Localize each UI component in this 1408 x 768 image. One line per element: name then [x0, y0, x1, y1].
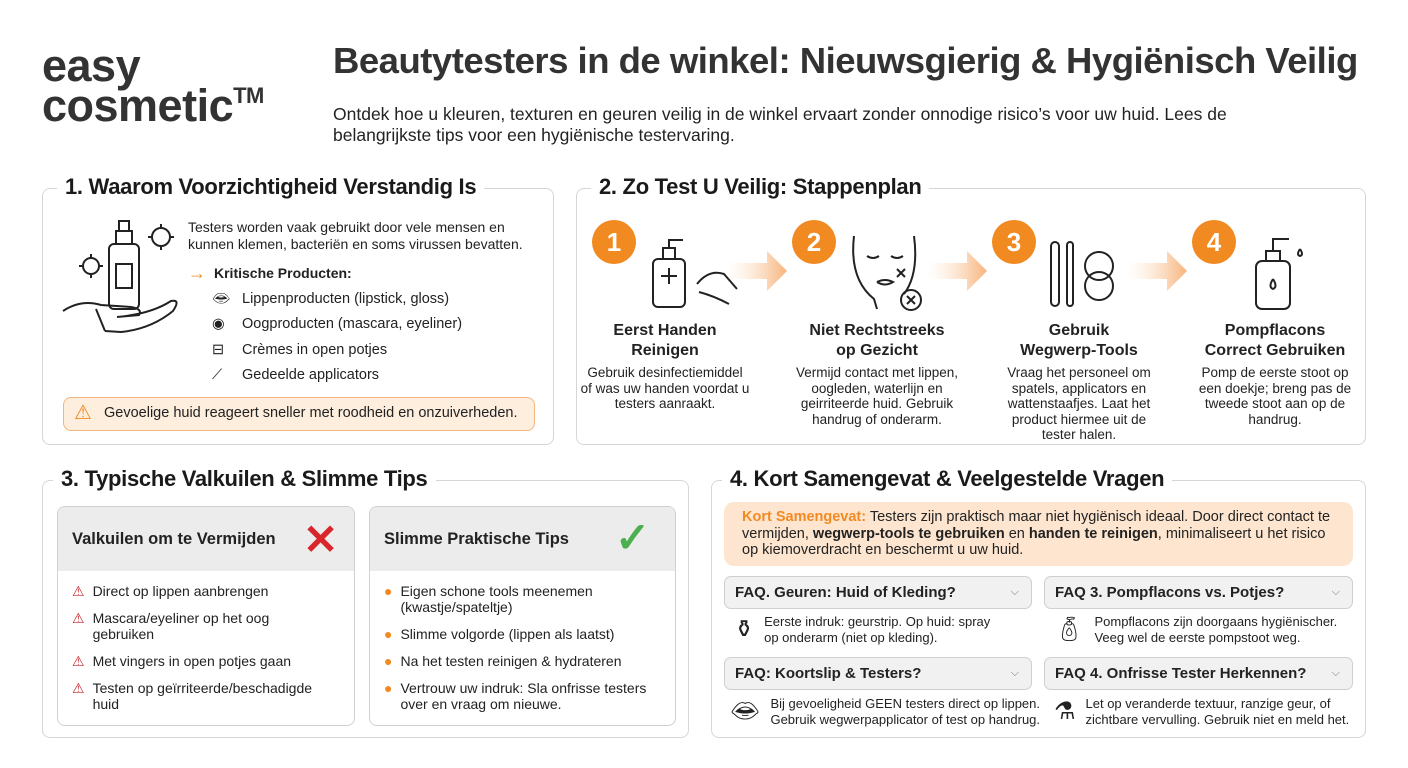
faq 1 answer: op onderarm (niet op kleding).	[764, 630, 938, 645]
faq 1: FAQ. Geuren: Huid of Kleding?	[735, 584, 956, 601]
list: kritische producten: ⟋	[212, 367, 222, 383]
faq 2 answer: Bij gevoeligheid GEEN testers direct op lippen.	[770, 696, 1040, 711]
step 1: Reinigen	[631, 342, 699, 359]
faq 1 answer	[734, 614, 990, 645]
heading 3: 3. Typische Valkuilen & Slimme Tips	[61, 466, 428, 491]
faq 1 answer: ⚱	[734, 616, 754, 643]
card: tips: ●	[384, 583, 392, 599]
step 3: 3	[1007, 227, 1021, 257]
heading 2: 2. Zo Test U Veilig: Stappenplan	[599, 174, 921, 199]
card: valkuilen: Met vingers in open potjes gaan	[93, 653, 291, 669]
card: tips: ●	[384, 653, 392, 669]
step 2: op Gezicht	[836, 342, 918, 359]
step 2: Niet Rechtstreeks	[809, 322, 945, 339]
card: valkuilen: ⚠	[72, 610, 85, 626]
card: valkuilen	[57, 506, 355, 726]
faq 2 answer: 👄︎	[730, 698, 760, 725]
faq 4: ⌵	[1332, 667, 1340, 679]
callout: gevoelige huid: Gevoelige huid reageert sneller met roodheid en onzuiverheden.	[104, 405, 518, 421]
card: valkuilen: Mascara/eyeliner op het oog	[93, 610, 269, 626]
card: valkuilen: huid	[93, 696, 119, 712]
faq 2: ⌵	[1011, 667, 1019, 679]
step 4: Pomp de eerste stoot op een doekje; breng pas de tweede stoot aan op de handrug.	[1199, 365, 1351, 426]
faq 4	[1044, 657, 1353, 690]
faq 4 answer: Let op veranderde textuur, ranzige geur, of	[1086, 696, 1331, 711]
arrow 1	[735, 251, 787, 291]
list: kritische producten: 👄︎	[212, 290, 230, 306]
step 4: 4	[1207, 227, 1221, 257]
card: tips: (kwastje/spateltje)	[400, 599, 513, 615]
faq 4 answer: ⚗	[1054, 698, 1076, 725]
step 3: Gebruik	[1049, 322, 1109, 339]
panel: waarom voorzichtigheid	[42, 188, 554, 445]
faq 3 answer	[1054, 614, 1337, 645]
text: intro: Testers worden vaak gebruikt door vele mensen en kunnen klemen, bacteriën en soms virussen bevatten.	[188, 219, 523, 252]
step 2: 2	[807, 227, 821, 257]
card: tips: ●	[384, 680, 392, 696]
list: kritische producten: Oogproducten (mascara, eyeliner)	[242, 316, 462, 332]
faq 4 answer: zichtbare vervulling. Gebruik niet en meld het.	[1086, 712, 1349, 727]
icon: hand with spray bottle and germs	[62, 220, 178, 333]
step 2	[792, 220, 958, 427]
faq 4 answer	[1054, 696, 1349, 727]
list: kritische producten	[188, 263, 462, 383]
list: kritische producten: Lippenproducten (lipstick, gloss)	[242, 290, 449, 306]
card: valkuilen: Direct op lippen aanbrengen	[93, 583, 268, 599]
faq 3: FAQ 3. Pompflacons vs. Potjes?	[1055, 584, 1284, 601]
faq 3 answer: Veeg wel de eerste pompstoot weg.	[1094, 630, 1300, 645]
faq 2 answer	[730, 696, 1040, 727]
faq 4: FAQ 4. Onfrisse Tester Herkennen?	[1055, 665, 1306, 682]
arrow 3	[1135, 251, 1187, 291]
card: tips: ●	[384, 626, 392, 642]
faq 1 answer: Eerste indruk: geurstrip. Op huid: spray	[764, 614, 990, 629]
step 4	[1192, 220, 1351, 427]
step 3: Wegwerp-Tools	[1020, 342, 1138, 359]
list: kritische producten: →	[188, 263, 206, 283]
faq 3 answer: 🧴︎	[1054, 616, 1084, 643]
step 4: Pompflacons	[1225, 322, 1325, 339]
card: tips: Eigen schone tools meenemen	[400, 583, 593, 599]
card: tips	[369, 506, 676, 726]
faq 1	[724, 576, 1032, 609]
subtitle: Ontdek hoe u kleuren, texturen en geuren veilig in de winkel ervaart zonder onnodige risico’s voor uw huid. Lees de belangrijkste tips voor een hygiënische testervaring.	[333, 104, 1227, 145]
logo: easy	[42, 40, 140, 91]
faq 2 answer: Gebruik wegwerpapplicator of test op handrug.	[770, 712, 1040, 727]
faq 3 answer: Pompflacons zijn doorgaans hygiënischer.	[1094, 614, 1337, 629]
panel: valkuilen & tips	[42, 480, 689, 738]
callout: gevoelige huid: ⚠	[74, 402, 92, 424]
step 1: 1	[607, 227, 621, 257]
step 2: Vermijd contact met lippen, oogleden, waterlijn en geirriteerde huid. Gebruik handrug of onderarm.	[796, 365, 958, 426]
step 1	[581, 220, 749, 411]
step 3: Vraag het personeel om spatels, applicators en wattenstaafjes. Laat het product hiermee uit de tester halen.	[1007, 365, 1151, 442]
card: valkuilen: Valkuilen om te Vermijden	[72, 530, 276, 548]
card: valkuilen: ✕	[303, 516, 338, 563]
title: Beautytesters in de winkel: Nieuwsgierig & Hygiënisch Veilig	[333, 40, 1358, 81]
card: valkuilen: Testen op geïrriteerde/beschadigde	[93, 680, 312, 696]
list: kritische producten: Kritische Producten:	[214, 265, 352, 281]
step 1: Eerst Handen	[613, 322, 717, 339]
faq 3: ⌵	[1332, 586, 1340, 598]
list: kritische producten: ◉	[212, 316, 225, 332]
card: tips: Na het testen reinigen & hydrateren	[400, 653, 622, 669]
card: tips: Slimme volgorde (lippen als laatst)	[400, 626, 614, 642]
panel: samenvatting & FAQ	[711, 480, 1366, 738]
faq 2: FAQ: Koortslip & Testers?	[735, 665, 921, 682]
list: kritische producten: ⊟	[212, 342, 224, 358]
card: valkuilen: ⚠	[72, 653, 85, 669]
card: tips: Vertrouw uw indruk: Sla onfrisse testers	[400, 680, 646, 696]
arrow 2	[935, 251, 987, 291]
heading 4: 4. Kort Samengevat & Veelgestelde Vragen	[730, 466, 1164, 491]
step 1: Gebruik desinfectiemiddel of was uw handen voordat u testers aanraakt.	[581, 365, 749, 411]
callout: gevoelige huid	[63, 397, 535, 431]
step 3	[992, 220, 1151, 442]
heading 1: 1. Waarom Voorzichtigheid Verstandig Is	[65, 174, 476, 199]
card: valkuilen: gebruiken	[93, 626, 154, 642]
list: kritische producten: Crèmes in open potjes	[242, 342, 387, 358]
faq 1: ⌵	[1011, 586, 1019, 598]
logo: cosmeticTM	[42, 80, 264, 131]
list: kritische producten: Gedeelde applicators	[242, 367, 379, 383]
card: valkuilen: ⚠	[72, 583, 85, 599]
faq 2	[724, 657, 1032, 690]
card: tips: ✓	[615, 514, 650, 561]
card: tips: Slimme Praktische Tips	[384, 530, 569, 548]
panel: stappenplan	[576, 188, 1366, 445]
faq 3	[1044, 576, 1353, 609]
summary box: Kort Samengevat: Testers zijn praktisch maar niet hygiënisch ideaal. Door direct contact te vermijden, wegwerp-tools te gebruiken en handen te reinigen, minimaliseert u het risico op kiemoverdracht en beschermt u uw huid.	[742, 509, 1330, 558]
step 4: Correct Gebruiken	[1205, 342, 1345, 359]
logo	[42, 40, 264, 131]
card: valkuilen: ⚠	[72, 680, 85, 696]
card: tips: over en vraag om nieuwe.	[400, 696, 562, 712]
